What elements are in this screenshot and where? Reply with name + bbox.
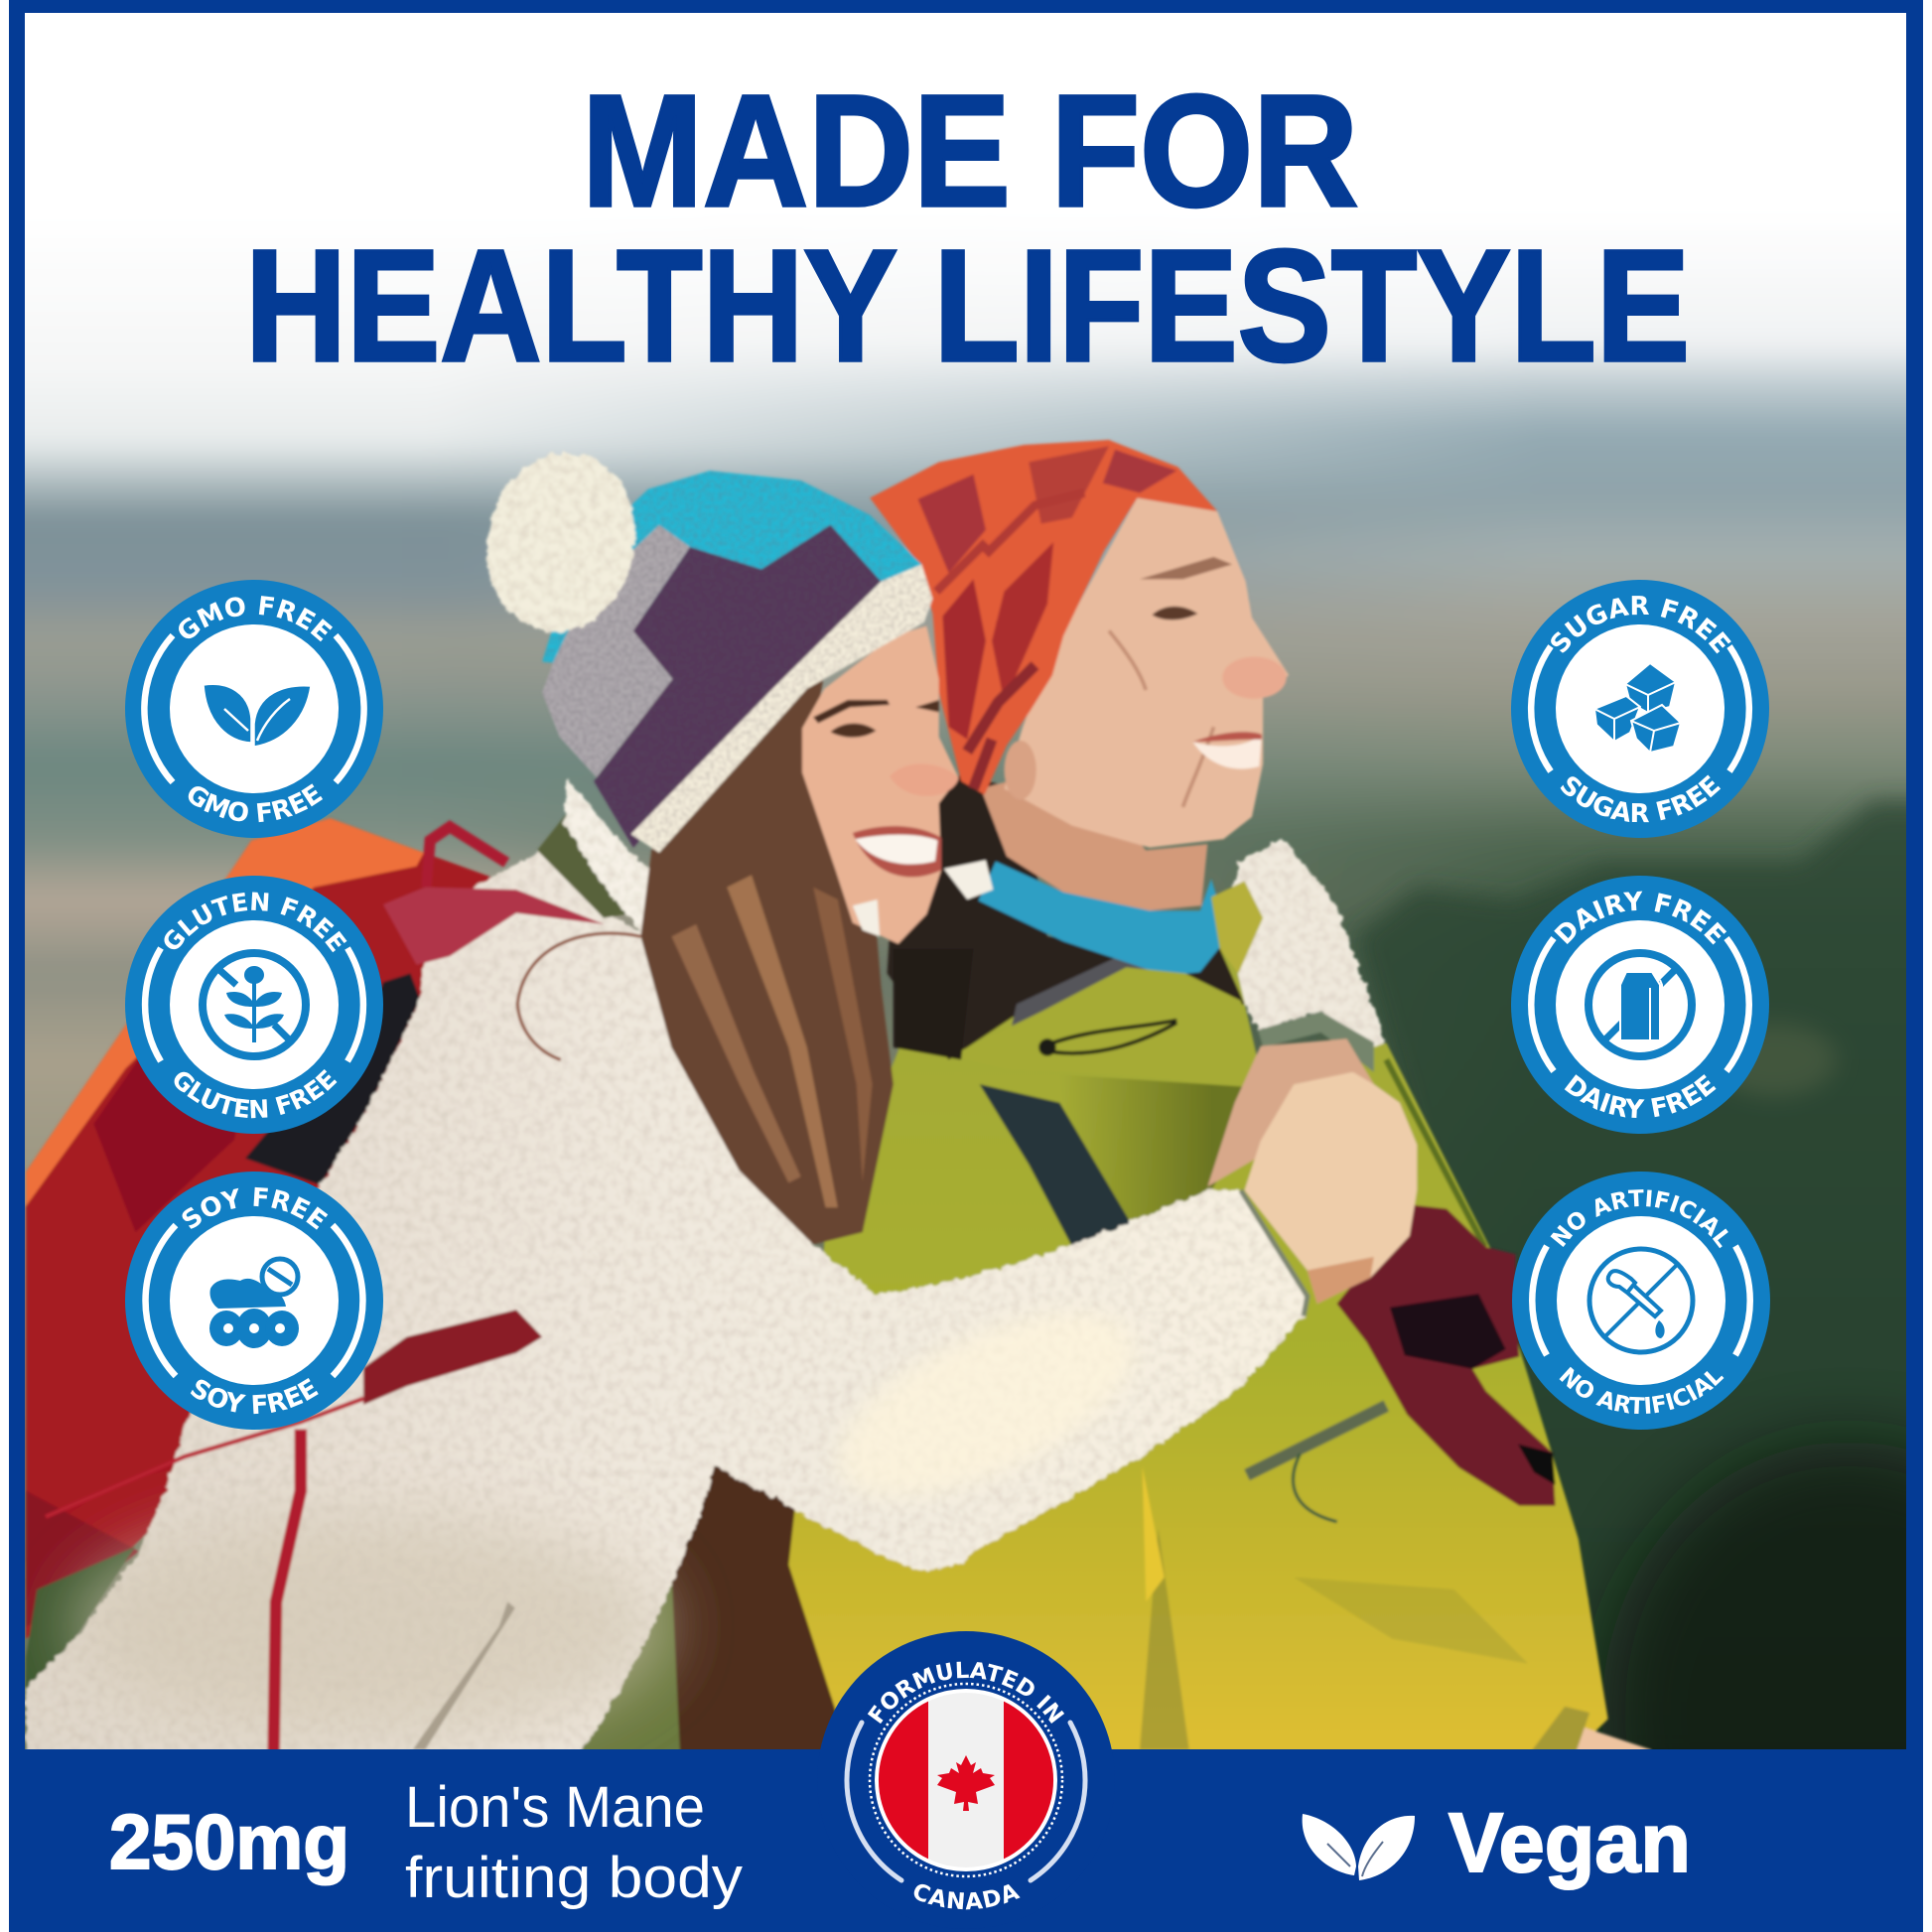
badge: gluten free bbox=[125, 876, 383, 1134]
people bbox=[26, 439, 1651, 1756]
badge: formulated in Canada bbox=[817, 1631, 1115, 1929]
hat pompom bbox=[470, 439, 651, 645]
red headscarf bbox=[870, 440, 1217, 795]
badge: GMO free: GMO FREE bbox=[189, 783, 323, 822]
red vertical strap bbox=[274, 1430, 301, 1756]
icon: crossed-out milk carton bbox=[1588, 953, 1692, 1056]
title bbox=[245, 62, 1690, 394]
long brown hair bbox=[517, 665, 973, 1245]
badge: GMO free: GMO FREE bbox=[179, 596, 333, 641]
badge: gluten free: GLUTEN FREE bbox=[175, 1069, 338, 1118]
yellow-green jacket bbox=[788, 949, 1651, 1756]
knitted bobble hat bbox=[542, 471, 933, 853]
badge: dairy free bbox=[1511, 876, 1769, 1134]
dark hair behind necks and collar interior bbox=[888, 763, 1245, 1059]
icon: soy pod with no sign bbox=[209, 1259, 299, 1348]
badge: sugar free bbox=[1511, 580, 1769, 838]
clasped hands and gloves bbox=[1207, 1012, 1555, 1506]
badge: no artificial: NO ARTIFICIAL bbox=[1554, 1363, 1728, 1420]
icon: Canadian flag bbox=[879, 1693, 1053, 1867]
badge: no artificial bbox=[1512, 1172, 1770, 1430]
footer: 250mg: 250mg bbox=[109, 1798, 349, 1885]
jacket collar bbox=[961, 880, 1265, 1060]
badge: formulated in Canada: CANADA bbox=[908, 1878, 1024, 1915]
inner jacket and coat collar bbox=[537, 778, 690, 961]
badge: soy free: SOY FREE bbox=[183, 1187, 328, 1230]
badge: dairy free: DAIRY FREE bbox=[1554, 892, 1726, 945]
icon: white vegan leaves bbox=[1303, 1814, 1415, 1880]
badge: dairy free: DAIRY FREE bbox=[1565, 1074, 1716, 1118]
badge: no artificial: NO ARTIFICIAL bbox=[1547, 1186, 1736, 1253]
footer: Lion's Mane fruiting body bbox=[405, 1775, 743, 1910]
title line 2: HEALTHY LIFESTYLE bbox=[245, 216, 1690, 394]
badge: sugar free: SUGAR FREE bbox=[1551, 596, 1731, 653]
backpack bbox=[25, 816, 510, 1639]
turquoise neck fleece bbox=[978, 862, 1228, 976]
icon: sugar cubes bbox=[1594, 663, 1681, 753]
badge: soy free bbox=[125, 1172, 383, 1430]
footer: Lion's Mane fruiting body: fruiting body bbox=[405, 1846, 743, 1910]
coat fluff at cheek and chin bbox=[853, 860, 993, 936]
badge: gluten free: GLUTEN FREE bbox=[165, 892, 347, 953]
red chest strap bbox=[46, 1310, 542, 1517]
badge: GMO free bbox=[125, 580, 383, 838]
badge: soy free: SOY FREE bbox=[191, 1378, 319, 1414]
footer: Vegan: Vegan bbox=[1449, 1796, 1691, 1889]
badge: sugar free: SUGAR FREE bbox=[1561, 774, 1721, 822]
title line 1: MADE FOR bbox=[582, 62, 1358, 239]
brown trousers and grass bbox=[671, 1465, 836, 1749]
badge: formulated in Canada: FORMULATED IN bbox=[864, 1658, 1068, 1728]
grass at lower left bbox=[26, 1547, 136, 1691]
pink backpack strap over coat bbox=[383, 888, 604, 965]
white fleece coat bbox=[26, 850, 1308, 1756]
icon: two leaves bbox=[204, 684, 311, 747]
far sleeve over shoulder bbox=[1230, 838, 1387, 1048]
younger woman's face bbox=[802, 625, 959, 944]
footer: Lion's Mane fruiting body: Lion's Mane bbox=[405, 1775, 705, 1840]
older woman's neck and face bbox=[981, 497, 1289, 910]
icon: crossed-out dropper bbox=[1589, 1249, 1693, 1352]
icon: crossed-out wheat bbox=[203, 953, 306, 1056]
